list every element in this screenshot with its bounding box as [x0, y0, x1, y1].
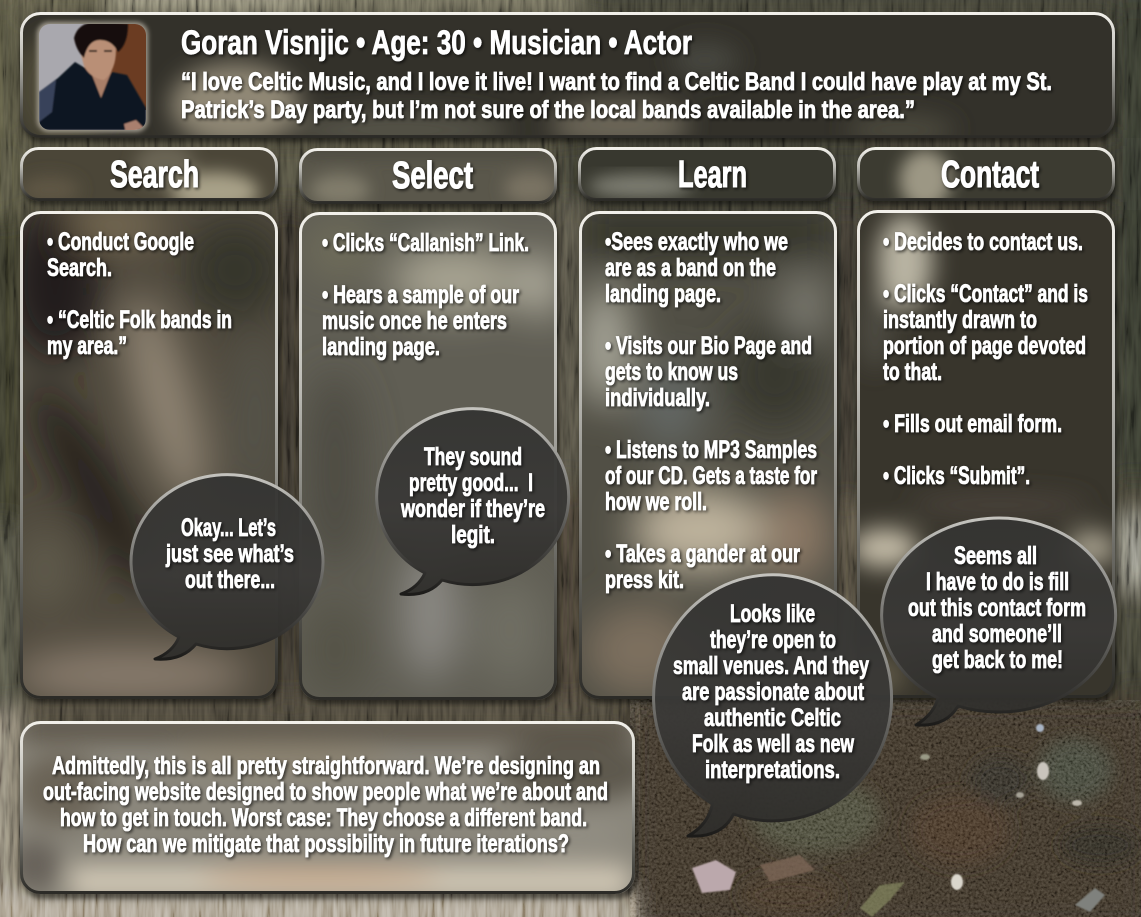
speech bubble: search: out there...: [185, 566, 275, 594]
panel: contact heading: Contact: [941, 154, 1039, 196]
panel: contact heading: [857, 147, 1115, 201]
speech bubble: contact: Seems all: [954, 542, 1037, 570]
persona title: Goran Visnjic • Age: 30 • Musician • Actor: [181, 24, 692, 62]
select step text: • Hears a sample of our: [322, 281, 519, 309]
speech bubble: learn: authentic Celtic: [704, 704, 841, 732]
search step text: my area.”: [47, 332, 127, 360]
closing note text: how to get in touch. Worst case: They choose a different band.: [60, 804, 587, 832]
speech bubble: contact: [882, 518, 1116, 725]
search step text: Search.: [47, 254, 112, 282]
speech bubble: select: wonder if they’re: [400, 495, 545, 523]
speech bubble: learn: interpretations.: [705, 756, 840, 784]
speech bubble: learn: Looks like: [730, 600, 815, 628]
select step text: [322, 229, 529, 361]
contact step text: [883, 228, 1088, 490]
learn step text: press kit.: [605, 566, 684, 594]
speech bubble: search: Okay... Let’s: [181, 514, 276, 542]
speech bubble: select: legit.: [451, 521, 495, 549]
ground pebbles: [692, 724, 1105, 917]
speech bubble: learn: small venues. And they: [673, 652, 869, 680]
contact step text: instantly drawn to: [883, 306, 1037, 334]
closing note text: out-facing website designed to show people what we’re about and: [43, 778, 608, 806]
learn step text: are as a band on the: [605, 254, 776, 282]
closing note text: How can we mitigate that possibility in future iterations?: [83, 830, 569, 858]
panel: select heading: [299, 146, 557, 206]
panel: closing note: [20, 721, 635, 894]
panel: select steps: [299, 212, 560, 700]
search step text: • “Celtic Folk bands in: [47, 306, 232, 334]
learn step text: how we roll.: [605, 488, 707, 516]
speech bubble: contact: get back to me!: [932, 646, 1063, 674]
persona quote: [181, 68, 1052, 124]
portrait photo: [37, 20, 150, 133]
contact step text: • Fills out email form.: [883, 410, 1062, 438]
panel: learn steps: [579, 205, 838, 699]
learn step text: • Listens to MP3 Samples: [605, 436, 817, 464]
learn step text: gets to know us: [605, 358, 738, 386]
panel: search heading: Search: [110, 154, 199, 196]
speech bubble: search: just see what’s: [165, 540, 294, 568]
panel: select heading: Select: [392, 155, 473, 197]
closing note text: Admittedly, this is all pretty straightforward. We’re designing an: [52, 752, 600, 780]
learn step text: individually.: [605, 384, 710, 412]
speech bubble: search: [131, 475, 323, 659]
speech bubble: learn: Folk as well as new: [692, 730, 854, 758]
speech bubble: learn: [654, 575, 892, 836]
speech bubble: learn: they’re open to: [710, 626, 836, 654]
contact step text: to that.: [883, 358, 942, 386]
learn step text: •Sees exactly who we: [605, 228, 788, 256]
speech bubble: contact: I have to do is fill: [926, 568, 1069, 596]
learn step text: • Visits our Bio Page and: [605, 332, 812, 360]
learn step text: landing page.: [605, 280, 721, 308]
speech bubble: learn: are passionate about: [682, 678, 864, 706]
search step text: [47, 228, 232, 360]
speech bubble: select: pretty good... I: [409, 469, 533, 497]
panel: learn heading: Learn: [678, 154, 747, 196]
panel: contact steps: [851, 210, 1118, 698]
select step text: landing page.: [322, 333, 440, 361]
speech bubble: contact: and someone’ll: [932, 620, 1062, 648]
panel: learn heading: [578, 147, 836, 201]
persona quote: Patrick’s Day party, but I’m not sure of the local bands available in the area.”: [181, 96, 915, 124]
learn step text: of our CD. Gets a taste for: [605, 462, 817, 490]
select step text: • Clicks “Callanish” Link.: [322, 229, 529, 257]
closing note text: [43, 752, 608, 858]
contact step text: • Clicks “Submit”.: [883, 462, 1030, 490]
panel: search steps: [20, 211, 278, 699]
panel: search heading: [20, 147, 278, 201]
select step text: music once he enters: [322, 307, 507, 335]
panel: persona header: [10, 12, 1115, 150]
search step text: • Conduct Google: [47, 228, 194, 256]
learn step text: • Takes a gander at our: [605, 540, 800, 568]
learn step text: [605, 228, 817, 594]
speech bubble: select: [377, 409, 569, 594]
speech bubble: select: They sound: [424, 443, 522, 471]
